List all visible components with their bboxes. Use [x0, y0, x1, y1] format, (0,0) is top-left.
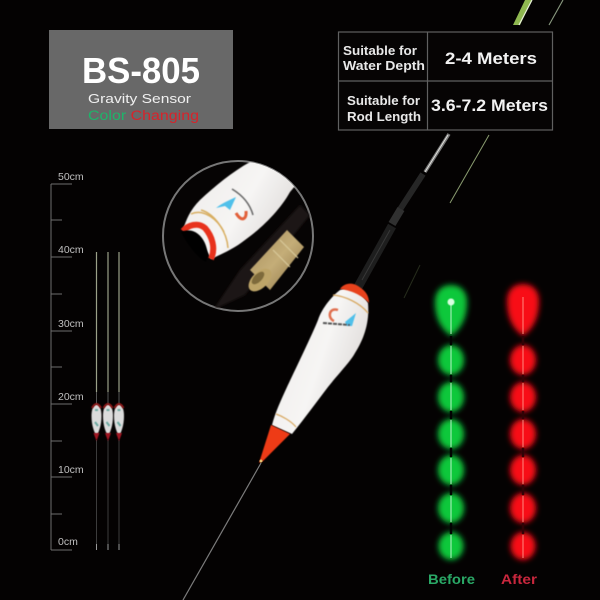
inset: brass sleeve [244, 230, 304, 296]
float 1 [92, 252, 102, 550]
top red cap [340, 284, 369, 303]
label: rod length: Suitable for [347, 94, 420, 108]
title: model name: BS-805 [82, 50, 200, 91]
float 2 [103, 252, 113, 550]
label: rod length: Rod Length [347, 110, 421, 124]
subtitle: color changing: Color Changing [88, 108, 199, 123]
float body [272, 289, 368, 434]
before label: Before [428, 572, 476, 587]
red tip cone [259, 425, 290, 463]
logo [323, 309, 356, 326]
label: water depth: Water Depth [343, 59, 425, 73]
gold band [333, 295, 368, 313]
inset: gold bands [191, 210, 228, 248]
lower gold band [276, 414, 296, 427]
float 3 [114, 252, 124, 550]
ruler labels: 40cm [58, 244, 84, 256]
inset: float body [183, 160, 300, 259]
label: water depth: Suitable for [343, 44, 417, 58]
height ruler [51, 171, 84, 550]
before glow column [428, 285, 476, 587]
green glow [435, 285, 467, 560]
after glow column [501, 284, 539, 587]
ruler labels: 20cm [58, 391, 84, 403]
inset: black tip [182, 230, 208, 254]
ruler labels: 10cm [58, 464, 84, 476]
red glow [507, 284, 539, 560]
ruler labels: 0cm [58, 536, 78, 548]
subtitle: gravity sensor: Gravity Sensor [88, 91, 192, 106]
value: rod length: 3.6-7.2 Meters [431, 96, 548, 115]
ruler labels [58, 171, 84, 548]
main float rod [183, 134, 489, 600]
three small floats [92, 252, 124, 550]
green lit core [450, 300, 452, 558]
red lit core [522, 297, 524, 558]
inset: dark rod behind [213, 205, 310, 310]
inset: red band [183, 225, 213, 259]
rod top fragments [513, 0, 563, 25]
main float [259, 284, 369, 463]
value: water depth: 2-4 Meters [445, 49, 537, 68]
after label: After [501, 572, 538, 587]
detail inset circle [163, 160, 313, 311]
spec table [338, 32, 552, 130]
ruler labels: 50cm [58, 171, 84, 183]
title panel [49, 30, 233, 129]
inset: logo [216, 189, 253, 219]
ruler labels: 30cm [58, 318, 84, 330]
